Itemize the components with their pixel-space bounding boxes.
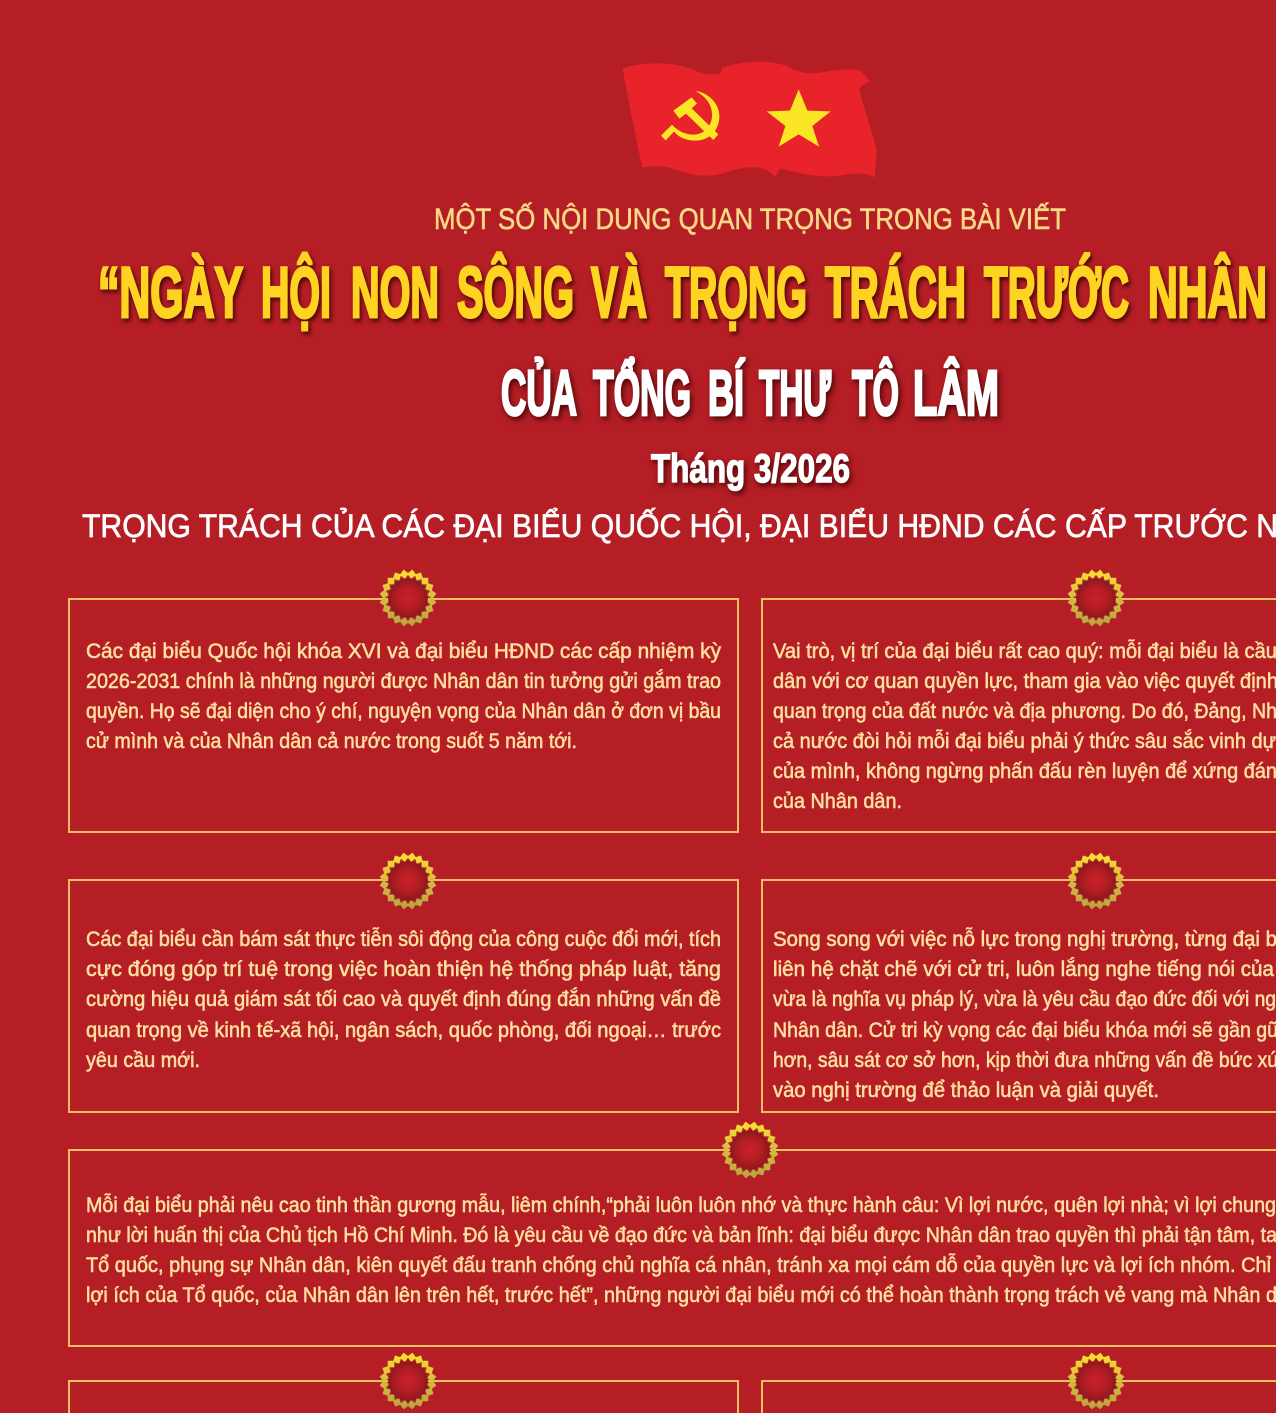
panel text: quyền. Họ sẽ đại diện cho ý chí, nguyện vọng của Nhân dân ở đơn vị bầu: [86, 700, 721, 723]
date: Tháng 3/2026: [651, 447, 850, 491]
panel text: liên hệ chặt chẽ với cử tri, luôn lắng nghe tiếng nói của: [773, 958, 1274, 981]
icon: party and national flag: [623, 62, 877, 177]
medallion: [1064, 849, 1128, 913]
panel: integrity and example: [69, 1118, 1276, 1346]
subtitle: author: LÂM: [913, 356, 999, 429]
kicker heading: MỘT SỐ NỘI DUNG QUAN TRỌNG TRONG BÀI VIẾT: [434, 202, 1066, 236]
panel text: [86, 1194, 1276, 1307]
subtitle: author: TÔ: [852, 356, 899, 429]
main title: VÀ: [591, 254, 647, 333]
panel text: [773, 640, 1276, 813]
panel text: cực đóng góp trí tuệ trong việc hoàn thiện hệ thống pháp luật, tăng: [86, 958, 721, 981]
panel: contact with voters: [762, 849, 1276, 1112]
hammer and sickle: [661, 91, 719, 141]
main title: NON: [351, 254, 439, 333]
panel text: [773, 928, 1276, 1102]
subtitle: author: CỦA: [501, 356, 577, 429]
panel text: [86, 640, 721, 753]
medallion: [1064, 566, 1128, 630]
panel: bottom left (cropped): [69, 1349, 738, 1413]
main title: SÔNG: [457, 253, 574, 333]
panel text: vào nghị trường để thảo luận và giải quyết.: [773, 1079, 1159, 1102]
medallion: [1064, 1349, 1128, 1413]
panel text: cử mình và của Nhân dân cả nước trong suốt 5 năm tới.: [86, 730, 577, 753]
panel: elected representatives: [69, 566, 738, 832]
panel text: Song song với việc nỗ lực trong nghị trường, từng đại b: [773, 928, 1276, 951]
star: [767, 89, 831, 147]
panel: role of representatives: [762, 566, 1276, 832]
panel: bottom right (cropped): [762, 1349, 1276, 1413]
panel text: cường hiệu quả giám sát tối cao và quyết định đúng đắn những vấn đề: [86, 988, 721, 1011]
panel text: Các đại biểu Quốc hội khóa XVI và đại biểu HĐND các cấp nhiệm kỳ: [86, 640, 721, 663]
panel text: [86, 928, 721, 1072]
medallion: [376, 1349, 440, 1413]
main title: TRỌNG: [665, 254, 807, 333]
main title: “NGÀY: [98, 254, 243, 333]
medallion: [376, 566, 440, 630]
subtitle: author: TỔNG: [593, 356, 691, 429]
main title: [98, 253, 1267, 333]
panel text: Các đại biểu cần bám sát thực tiễn sôi động của công cuộc đổi mới, tích: [86, 928, 721, 951]
medallion: [718, 1118, 782, 1182]
subtitle: author: BÍ: [708, 357, 745, 429]
panel text: 2026-2031 chính là những người được Nhân dân tin tưởng gửi gắm trao: [86, 670, 721, 693]
main title: HỘI: [261, 253, 331, 333]
medallion: [376, 849, 440, 913]
panel text: yêu cầu mới.: [86, 1049, 200, 1072]
main title: TRƯỚC: [984, 254, 1129, 333]
panel text: quan trọng về kinh tế-xã hội, ngân sách, quốc phòng, đối ngoại… trước: [86, 1019, 721, 1042]
subtitle: author: [501, 356, 999, 429]
panel: practical contribution: [69, 849, 738, 1112]
panel text: của Nhân dân.: [773, 790, 902, 813]
subtitle: author: THƯ: [759, 357, 831, 429]
flag cloth: [623, 62, 877, 177]
main title: TRÁCH: [825, 254, 966, 333]
